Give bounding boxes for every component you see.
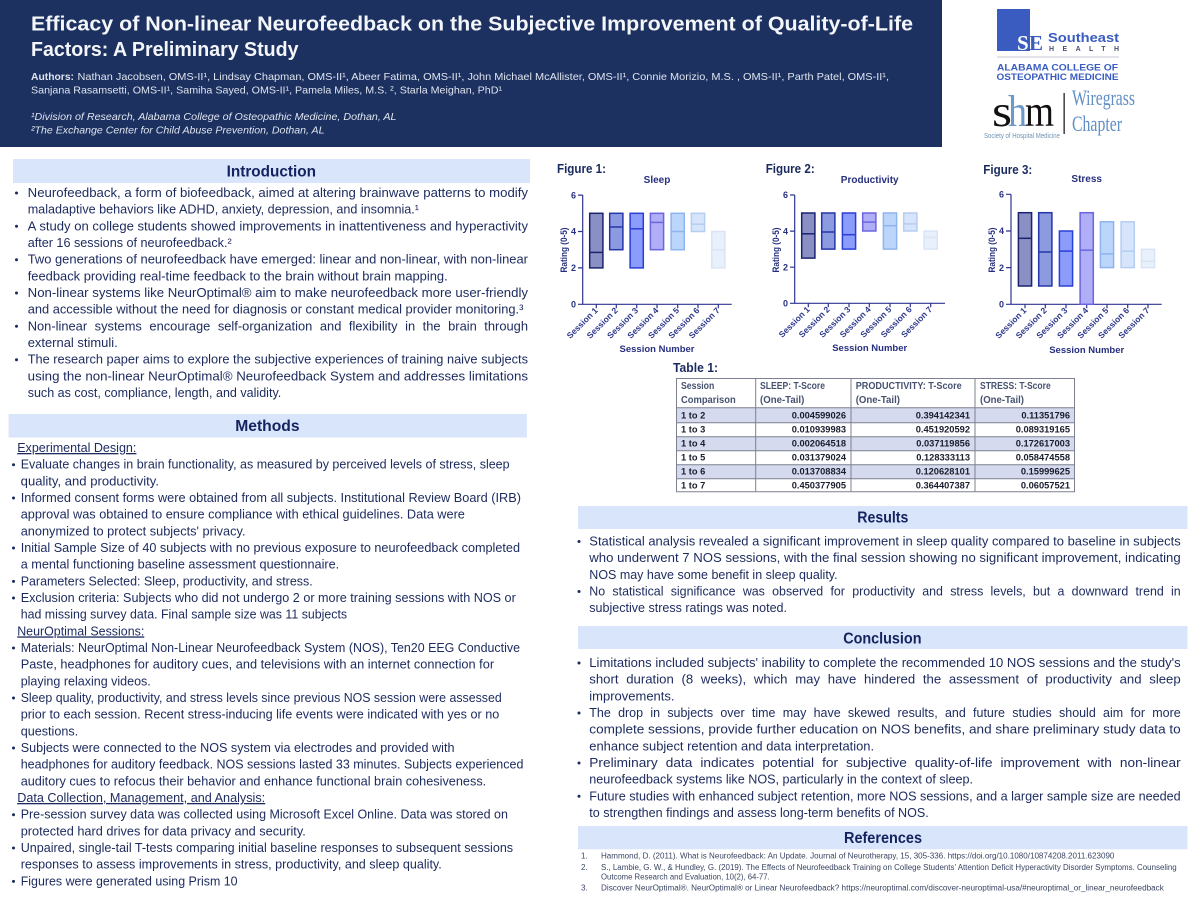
text block: methods: quality, and productivity. bbox=[21, 473, 159, 488]
text block: methods: Informed consent forms were obtained from all subjects. Institutional Review Board (IRB) bbox=[21, 490, 521, 505]
affiliations bbox=[31, 111, 397, 136]
text block: methods: auditory cues to refocus their behavior and enhance functional brain cohesiveness. bbox=[21, 773, 486, 788]
text block: reference list bbox=[581, 852, 1177, 892]
figure 3: stress box chart: Session 6 bbox=[1096, 305, 1131, 340]
text block: conclusion bullets: neurofeedback systems like NOS, particularly in the context of sleep. bbox=[589, 772, 973, 787]
logo: Society of Hospital Medicine Wiregrass Chapter: Chapter bbox=[1072, 111, 1122, 136]
figure 3: stress box chart: Session 2 bbox=[1014, 305, 1049, 340]
table 1: t-scores: 0.11351796 bbox=[1021, 410, 1070, 420]
text block: reference list: 3. bbox=[581, 884, 588, 892]
table 1: t-scores: 0.013708834 bbox=[792, 466, 847, 476]
text block: conclusion bullets: Limitations included subjects' inability to complete the recommended 10 NOS sessions and the study's bbox=[589, 655, 1181, 670]
text block: conclusion bullets: Future studies with enhanced subject retention, more NOS sessions, and a larger sample size are needed bbox=[589, 788, 1181, 803]
text block: reference list: Hammond, D. (2011). What is Neurofeedback: An Update. Journal of Neurotherapy, 15, 305-336. https://doi.org/10.1080/10874208.2011.623090 bbox=[601, 852, 1115, 860]
panel: references bbox=[578, 826, 1188, 892]
text block: introduction bullets: Non-linear systems like NeurOptimal® aim to make neurofeedback more user-friendly bbox=[28, 285, 529, 300]
text block: methods: a mental functioning baseline assessment questionnaire. bbox=[21, 557, 339, 572]
text block: conclusion bullets: The drop in subjects over time may have skewed results, and future studies should aim for more bbox=[589, 705, 1181, 720]
figure 1: sleep box chart: Session 4 bbox=[625, 305, 661, 340]
figure 1: sleep box chart: 6 bbox=[571, 190, 576, 200]
text block: introduction bullets: A study on college students showed improvements in inattentiveness and hyperactivity bbox=[28, 218, 528, 233]
figure 3: stress box chart: 0 bbox=[999, 300, 1004, 310]
figure 2: productivity box chart: Session 6 bbox=[879, 304, 914, 339]
figure 2: productivity box chart: Figure 2: bbox=[766, 161, 815, 176]
text block: introduction bullets bbox=[15, 185, 529, 400]
text block: methods: Exclusion criteria: Subjects who did not undergo 2 or more training sessions with NOS or bbox=[21, 590, 516, 605]
authors bbox=[31, 71, 889, 96]
text block: introduction bullets: after 16 sessions of neurofeedback.² bbox=[28, 235, 232, 250]
text block: methods: had missing survey data. Final sample size was 11 subjects bbox=[21, 607, 348, 622]
title bbox=[31, 14, 913, 61]
figure 1: sleep box chart: Figure 1: bbox=[557, 161, 606, 176]
figure 1: sleep box chart: Rating (0-5) bbox=[559, 227, 569, 272]
table 1: t-scores: 0.037119856 bbox=[916, 438, 970, 448]
table 1: t-scores: 0.451920592 bbox=[916, 424, 970, 434]
text block: introduction bullets: Two generations of neurofeedback have emerged: linear and non-linear, with non-linear bbox=[28, 252, 529, 267]
text block: methods: Paste, headphones for auditory cues, and televisions with an internet connection for bbox=[21, 657, 495, 672]
panel: results bbox=[578, 506, 1188, 615]
affiliations: ¹Division of Research, Alabama College of Osteopathic Medicine, Dothan, AL bbox=[31, 111, 397, 123]
text block: methods: Data Collection, Management, and Analysis: bbox=[17, 790, 265, 805]
text block: reference list: Discover NeurOptimal®. NeurOptimal® or Linear Neurofeedback? https://neuroptimal.com/discover-neuroptimal-usa/#neuroptimal_or_linear_neurofeedback bbox=[601, 884, 1165, 892]
text block: conclusion bullets: enhance subject retention and data interpretation. bbox=[589, 738, 874, 753]
text block: conclusion bullets: to strengthen findings and assess long-term benefits of NOS. bbox=[589, 805, 929, 820]
figure 1: sleep box chart: Session 5 bbox=[646, 305, 681, 340]
table 1: t-scores: 1 to 6 bbox=[681, 466, 705, 476]
table 1: t-scores: 0.364407387 bbox=[916, 480, 970, 490]
text block: methods: Parameters Selected: Sleep, productivity, and stress. bbox=[21, 573, 313, 588]
title: Efficacy of Non-linear Neurofeedback on the Subjective Improvement of Quality-of-Life bbox=[31, 14, 913, 36]
figure 1: sleep box chart: 2 bbox=[571, 263, 576, 273]
text block: methods: Unpaired, single-tail T-tests comparing initial baseline responses to subsequent sessions bbox=[21, 840, 514, 855]
figure 2: productivity box chart: 4 bbox=[783, 226, 788, 236]
logo: Southeast Health bbox=[996, 9, 1120, 83]
text block: methods: protected hard drives for data privacy and security. bbox=[21, 823, 306, 838]
table 1: t-scores: 0.120628101 bbox=[916, 466, 970, 476]
table 1: t-scores: 0.15999625 bbox=[1021, 466, 1070, 476]
table 1: t-scores: 0.031379024 bbox=[792, 452, 847, 462]
table 1: t-scores: 0.06057521 bbox=[1021, 480, 1070, 490]
text block: reference list: Outcome Research and Evaluation, 10(2), 64-77. bbox=[601, 872, 770, 882]
heading: references: References bbox=[844, 830, 922, 847]
text block: conclusion bullets: complete sessions, provide further education on NOS benefits, and share preliminary study data to bbox=[589, 722, 1181, 737]
figure 3: stress box chart: 2 bbox=[999, 263, 1004, 273]
figure 1: sleep box chart: 4 bbox=[571, 227, 576, 237]
table 1: t-scores: 1 to 2 bbox=[681, 410, 705, 420]
text block: conclusion bullets: improvements. bbox=[589, 688, 674, 703]
table 1: t-scores: 0.394142341 bbox=[916, 410, 970, 420]
logo: Southeast Health: Southeast bbox=[1048, 30, 1120, 45]
panel: conclusion bbox=[578, 626, 1188, 820]
text block: methods: responses to assess improvements in stress, productivity, and sleep quality. bbox=[21, 857, 442, 872]
text block: methods: headphones for auditory feedback. NOS sessions lasted 33 minutes. Subjects experienced bbox=[21, 757, 523, 772]
table 1: t-scores: Table 1: bbox=[673, 360, 718, 375]
logo: Southeast Health: HEALTH bbox=[1049, 46, 1119, 53]
figure 3: stress box chart: Session 3 bbox=[1034, 305, 1070, 340]
authors: Authors: bbox=[31, 71, 74, 83]
figure 2: productivity box chart: Session 7 bbox=[899, 304, 934, 339]
figure 1: sleep box chart: Session 2 bbox=[585, 305, 620, 340]
figure 3: stress box chart: 4 bbox=[999, 226, 1004, 236]
logo: Southeast Health: ALABAMA COLLEGE OF bbox=[997, 62, 1118, 74]
text block: introduction bullets: feedback providing real-time feedback to the brain without brain mapping. bbox=[28, 268, 448, 283]
text block: results bullets: No statistical significance was observed for productivity and stress levels, but a downward trend in bbox=[589, 584, 1181, 598]
table 1: t-scores: STRESS: T-Score bbox=[980, 381, 1051, 392]
figure 2: productivity box chart bbox=[766, 161, 945, 354]
logo: Society of Hospital Medicine Wiregrass Chapter: h bbox=[1008, 87, 1027, 136]
table 1: t-scores: 0.128333113 bbox=[916, 452, 970, 462]
figure 2: productivity box chart: Rating (0-5) bbox=[771, 227, 781, 272]
text block: methods: questions. bbox=[21, 723, 78, 738]
figure 3: stress box chart: Rating (0-5) bbox=[987, 227, 997, 272]
title: Factors: A Preliminary Study bbox=[31, 39, 299, 61]
figure 1: sleep box chart bbox=[557, 161, 732, 355]
figure 1: sleep box chart: Session 3 bbox=[605, 305, 640, 340]
figure 1: sleep box chart: Session 7 bbox=[687, 305, 722, 340]
figure 1: sleep box chart: Session 1 bbox=[565, 305, 600, 340]
logo: Society of Hospital Medicine Wiregrass Chapter: Society of Hospital Medicine bbox=[984, 131, 1060, 140]
header banner bbox=[0, 0, 942, 147]
table 1: t-scores: 0.450377905 bbox=[792, 480, 846, 490]
table 1: t-scores: Comparison bbox=[681, 395, 736, 406]
figure 2: productivity box chart: 0 bbox=[783, 298, 788, 308]
logo: Southeast Health: E bbox=[1029, 31, 1043, 55]
text block: introduction bullets: using the non-linear NeurOptimal® Neurofeedback System and addresses limitations bbox=[28, 368, 528, 383]
figure 3: stress box chart: Session 4 bbox=[1055, 305, 1090, 340]
table 1: t-scores: 0.058474558 bbox=[1016, 452, 1070, 462]
figure 2: productivity box chart: Session 3 bbox=[817, 304, 853, 339]
table 1: t-scores: 1 to 5 bbox=[681, 452, 705, 462]
table 1: t-scores: 0.089319165 bbox=[1016, 424, 1070, 434]
figure 2: productivity box chart: Session 2 bbox=[797, 304, 832, 339]
text block: introduction bullets: Non-linear systems encourage self-organization and flexibility in the brain through bbox=[28, 318, 528, 333]
figure 1: sleep box chart: 0 bbox=[571, 300, 576, 310]
table 1: t-scores: (One-Tail) bbox=[760, 395, 804, 406]
authors: Nathan Jacobsen, OMS-II¹, Lindsay Chapman, OMS-II¹, Abeer Fatima, OMS-II¹, John Michael McAllister, OMS-II¹, Connie Morizio, M.S. , OMS-II¹, Parth Patel, OMS-II¹, bbox=[78, 71, 889, 83]
text block: methods: Experimental Design: bbox=[17, 440, 136, 455]
text block: reference list: 2. bbox=[581, 863, 588, 872]
figure 3: stress box chart: Session 1 bbox=[993, 305, 1029, 340]
text block: reference list: S., Lambie, G. W., & Hundley, G. (2019). The Effects of Neurofeedback Training on College Students’ Attention Deficit Hyperactivity Disorder Symptoms. Counseling bbox=[601, 863, 1177, 872]
figure 1: sleep box chart: Sleep bbox=[644, 175, 670, 186]
logo: Society of Hospital Medicine Wiregrass Chapter bbox=[984, 85, 1135, 140]
logo: Southeast Health: OSTEOPATHIC MEDICINE bbox=[996, 72, 1118, 83]
text block: results bullets: Statistical analysis revealed a significant improvement in sleep quality compared to baseline in subjects bbox=[589, 534, 1181, 548]
text block: conclusion bullets bbox=[578, 655, 1181, 820]
table 1: t-scores: Session bbox=[681, 381, 714, 392]
affiliations: ²The Exchange Center for Child Abuse Prevention, Dothan, AL bbox=[31, 124, 325, 136]
text block: methods: NeurOptimal Sessions: bbox=[17, 623, 144, 638]
table 1: t-scores: 1 to 4 bbox=[681, 438, 706, 448]
text block: methods: Sleep quality, productivity, and stress levels since previous NOS session were assessed bbox=[21, 690, 502, 705]
panel: introduction bbox=[13, 159, 530, 400]
text block: introduction bullets: Neurofeedback, a form of biofeedback, aimed at altering brainwave patterns to modify bbox=[28, 185, 528, 200]
text block: introduction bullets: The research paper aims to explore the subjective experiences of training naive subjects bbox=[28, 352, 528, 367]
figure 2: productivity box chart: Session 1 bbox=[777, 304, 812, 339]
text block: results bullets: subjective stress ratings was noted. bbox=[589, 600, 787, 615]
panel: methods bbox=[9, 414, 527, 888]
text block: conclusion bullets: short duration (8 weeks), which may have hindered the assessment of productivity and sleep bbox=[589, 672, 1181, 687]
text block: methods: prior to each session. Recent stress-inducing life events were indicated with yes or no bbox=[21, 707, 499, 722]
figure 2: productivity box chart: Session 5 bbox=[858, 304, 894, 339]
figure 3: stress box chart: Session Number bbox=[1049, 345, 1124, 356]
heading: results: Results bbox=[857, 510, 908, 527]
figure 3: stress box chart: 6 bbox=[999, 190, 1004, 200]
text block: introduction bullets: and accessible without the need for diagnosis or constant medical provider monitoring.³ bbox=[28, 302, 524, 317]
figure 3: stress box chart bbox=[983, 162, 1162, 356]
logo: Society of Hospital Medicine Wiregrass Chapter: s bbox=[992, 87, 1012, 136]
text block: conclusion bullets: Preliminary data indicates potential for subjective quality-of-life improvement with non-linear bbox=[589, 755, 1181, 770]
figure 2: productivity box chart: 6 bbox=[783, 190, 788, 200]
table 1: t-scores: (One-Tail) bbox=[980, 395, 1024, 406]
logo: Society of Hospital Medicine Wiregrass Chapter: Wiregrass bbox=[1072, 85, 1135, 110]
text block: methods: Materials: NeurOptimal Non-Linear Neurofeedback System (NOS), Ten20 EEG Conductive bbox=[21, 640, 520, 655]
table 1: t-scores: (One-Tail) bbox=[856, 395, 900, 406]
table 1: t-scores: 0.004599026 bbox=[792, 410, 846, 420]
figure 1: sleep box chart: Session Number bbox=[620, 344, 695, 355]
text block: introduction bullets: such as cost, compliance, length, and validity. bbox=[28, 385, 281, 400]
table 1: t-scores: 0.002064518 bbox=[792, 438, 846, 448]
text block: methods: approval was obtained to ensure compliance with ethical guidelines. Data were bbox=[21, 507, 465, 522]
figure 2: productivity box chart: Session Number bbox=[832, 343, 907, 354]
figure 3: stress box chart: Stress bbox=[1071, 174, 1102, 185]
figure 3: stress box chart: Figure 3: bbox=[983, 162, 1032, 177]
table 1: t-scores: 0.010939983 bbox=[792, 424, 846, 434]
table 1: t-scores: 0.172617003 bbox=[1016, 438, 1070, 448]
logo: Society of Hospital Medicine Wiregrass Chapter: m bbox=[1025, 87, 1054, 136]
text block: results bullets: NOS may have some benefit in sleep quality. bbox=[589, 567, 838, 582]
text block: methods bbox=[12, 440, 523, 888]
text block: methods: Subjects were connected to the NOS system via electrodes and provided with bbox=[21, 740, 454, 755]
text block: methods: Initial Sample Size of 40 subjects with no previous exposure to neurofeedback completed bbox=[21, 540, 520, 555]
heading: methods: Methods bbox=[235, 418, 300, 435]
text block: methods: Evaluate changes in brain functionality, as measured by perceived levels of stress, sleep bbox=[21, 457, 510, 472]
figure 2: productivity box chart: Session 4 bbox=[838, 304, 873, 339]
text block: results bullets bbox=[578, 534, 1181, 615]
figure 2: productivity box chart: Productivity bbox=[841, 175, 899, 186]
text block: methods: anonymized to protect subjects' privacy. bbox=[21, 523, 246, 538]
text block: results bullets: who underwent 7 NOS sessions, with the final session showing no significant improvement, indicating bbox=[588, 550, 1181, 565]
table 1: t-scores: 1 to 3 bbox=[681, 424, 705, 434]
text block: reference list: 1. bbox=[581, 852, 588, 860]
text block: introduction bullets: maladaptive behaviors like ADHD, anxiety, depression, and insomnia.¹ bbox=[28, 202, 420, 217]
table 1: t-scores: PRODUCTIVITY: T-Score bbox=[856, 381, 962, 392]
table 1: t-scores: SLEEP: T-Score bbox=[760, 381, 825, 392]
authors: Sanjana Rasamsetti, OMS-II¹, Samiha Sayed, OMS-II¹, Pamela Miles, M.S. ², Starla Meighan, PhD¹ bbox=[31, 84, 503, 96]
text block: methods: Pre-session survey data was collected using Microsoft Excel Online. Data was stored on bbox=[21, 807, 508, 822]
text block: methods: playing relaxing videos. bbox=[21, 673, 151, 688]
figure 3: stress box chart: Session 7 bbox=[1116, 305, 1152, 340]
figure 3: stress box chart: Session 5 bbox=[1075, 305, 1111, 340]
heading: conclusion: Conclusion bbox=[843, 630, 922, 647]
text block: methods: Figures were generated using Prism 10 bbox=[21, 873, 238, 888]
figure 1: sleep box chart: Session 6 bbox=[666, 305, 702, 340]
table 1: t-scores: 1 to 7 bbox=[681, 480, 705, 490]
table 1: t-scores bbox=[673, 360, 1074, 492]
figure 2: productivity box chart: 2 bbox=[783, 262, 788, 272]
logo: Southeast Health: S bbox=[1017, 31, 1029, 55]
text block: introduction bullets: external stimuli. bbox=[28, 335, 118, 350]
heading: introduction: Introduction bbox=[227, 164, 316, 181]
